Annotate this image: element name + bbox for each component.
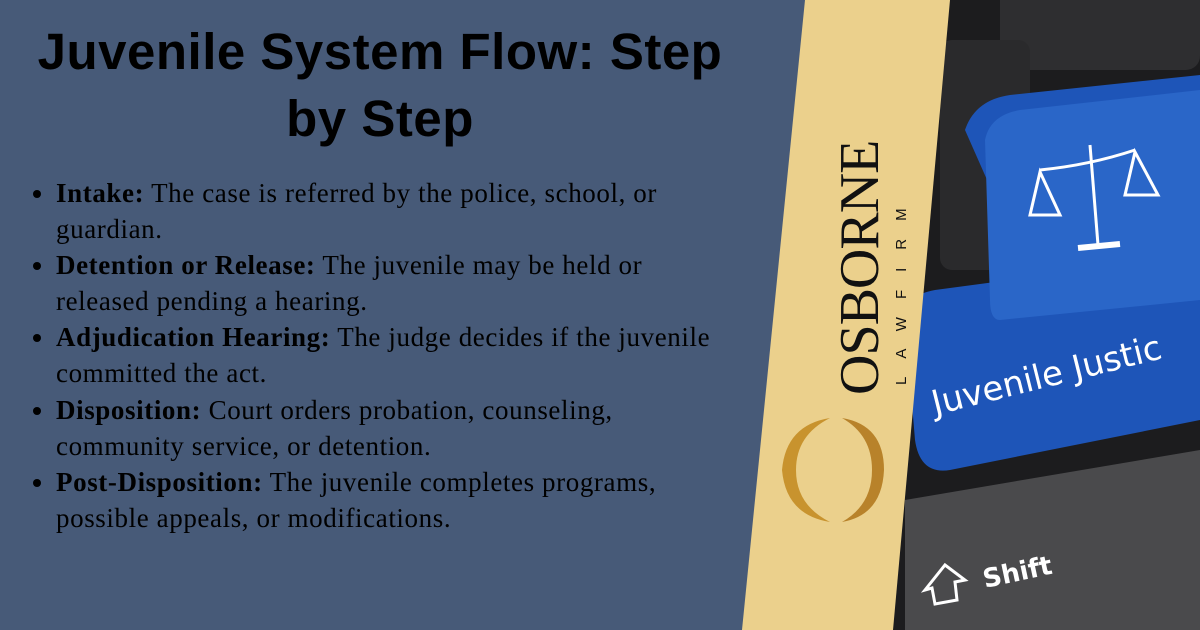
beige stripe — [742, 0, 950, 630]
key label: Juvenile Justic — [926, 328, 1166, 424]
icon: gold crescent — [782, 418, 830, 522]
step list: Intake: The case is referred by the police, school, or guardian. — [56, 178, 657, 244]
shift key — [905, 450, 1200, 630]
title: Juvenile System Flow: Step — [38, 23, 722, 80]
step list — [33, 178, 710, 533]
title: by Step — [286, 90, 474, 147]
step list: Disposition: Court orders probation, counseling, community service, or detention. — [56, 395, 613, 461]
logo — [782, 141, 910, 522]
step list: Post-Disposition: The juvenile completes programs, possible appeals, or modifications. — [56, 467, 656, 533]
shift key: Shift — [980, 551, 1055, 595]
logo: LAWFIRM — [893, 190, 910, 385]
title — [38, 23, 722, 147]
logo: OSBORNE — [829, 141, 891, 395]
blue key — [905, 75, 1200, 471]
step list: Detention or Release: The juvenile may be held or released pending a hearing. — [56, 250, 642, 316]
step list: Adjudication Hearing: The judge decides if the juvenile committed the act. — [56, 322, 710, 388]
icon: scales — [1030, 145, 1158, 248]
